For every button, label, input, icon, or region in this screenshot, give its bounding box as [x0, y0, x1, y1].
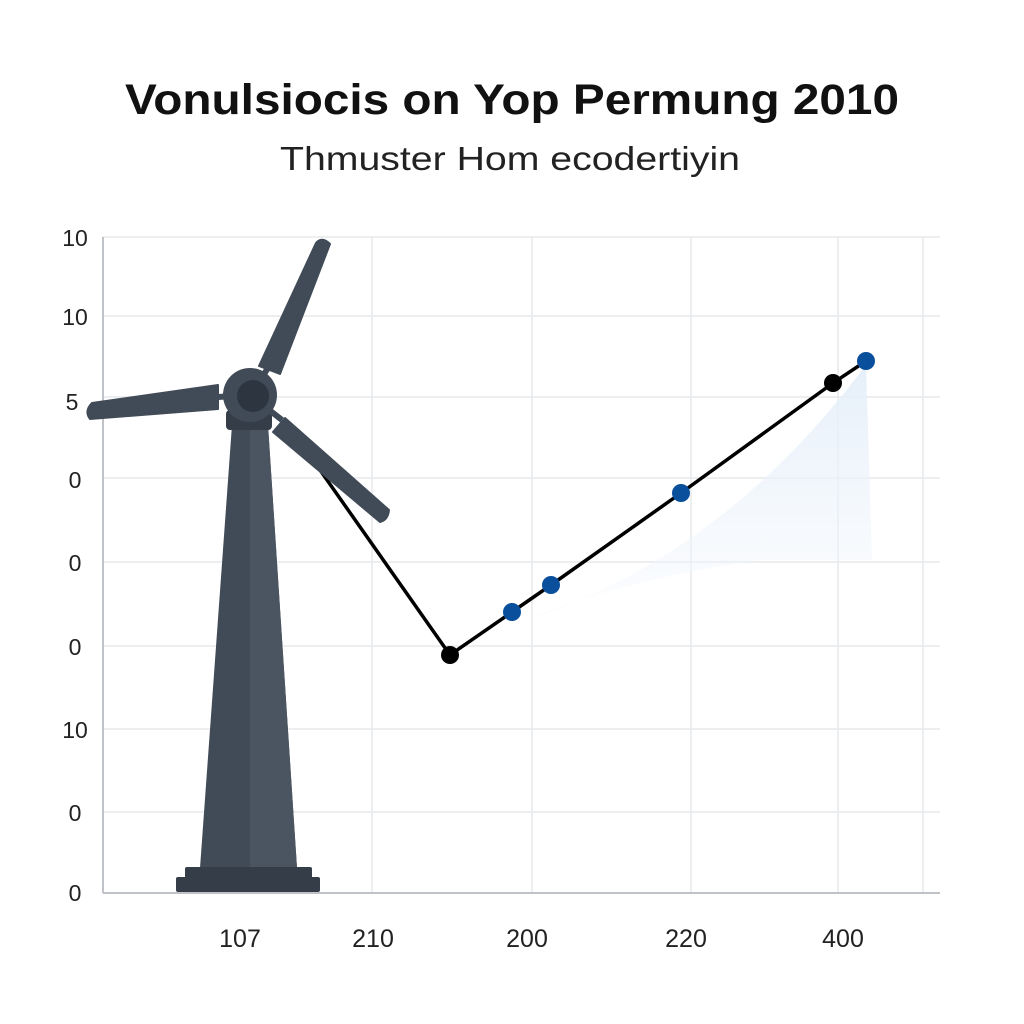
- x axis labels: [219, 925, 864, 953]
- y axis labels: 0: [69, 550, 81, 576]
- x axis labels: 107: [219, 925, 261, 953]
- icon: wind turbine: [87, 240, 389, 892]
- y axis labels: [62, 225, 88, 906]
- shaded area: [520, 365, 872, 622]
- y axis labels: 10: [62, 304, 88, 330]
- x axis labels: 210: [352, 925, 394, 953]
- subtitle: Thmuster Hom ecodertiyin: [280, 140, 740, 177]
- y axis labels: 10: [62, 717, 88, 743]
- y axis labels: 0: [69, 467, 81, 493]
- y axis labels: 5: [66, 389, 78, 415]
- y axis labels: 0: [69, 800, 81, 826]
- line series: [320, 352, 875, 664]
- y axis labels: 0: [69, 634, 81, 660]
- x axis labels: 400: [822, 925, 864, 953]
- y axis labels: 0: [69, 880, 81, 906]
- x axis labels: 200: [506, 925, 548, 953]
- title: Vonulsiocis on Yop Permung 2010: [125, 76, 899, 124]
- y axis labels: 10: [62, 225, 88, 251]
- x axis labels: 220: [665, 925, 707, 953]
- axes: [103, 237, 940, 893]
